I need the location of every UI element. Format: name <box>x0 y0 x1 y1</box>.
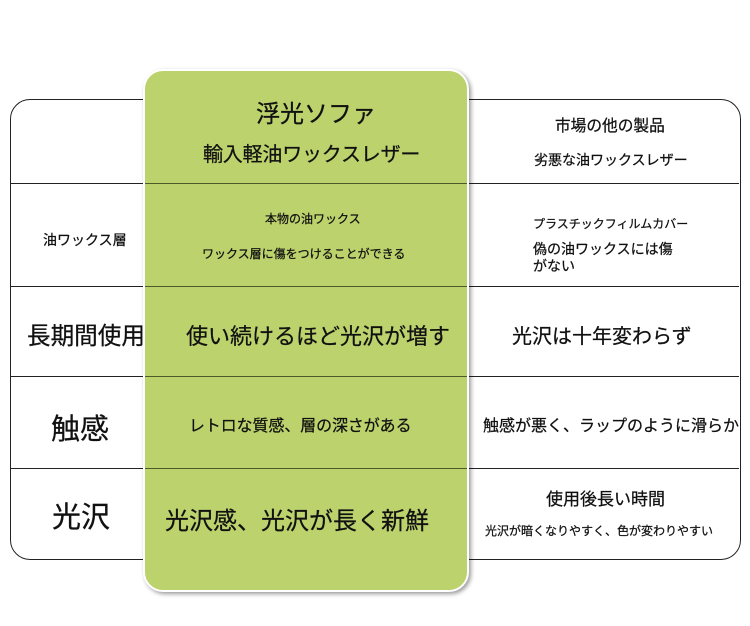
text: poor touch: 触感が悪く、ラップのように滑らか <box>483 418 739 435</box>
text: after long use: 使用後長い時間 <box>546 490 665 509</box>
text: fake oil wax has no scratches: 偽の油ワックスには傷がない <box>533 241 673 274</box>
heading: other material: 劣悪な油ワックスレザー <box>534 152 688 168</box>
green text: long lasting gloss: 光沢感、光沢が長く新鮮 <box>165 508 429 535</box>
row label: long term use: 長期間使用 <box>27 324 145 350</box>
row label: oil wax layer: 油ワックス層 <box>43 232 127 248</box>
row label: touch: 触感 <box>51 414 109 446</box>
green text: wax layer can be scratched: ワックス層に傷をつけることができる <box>202 247 405 261</box>
heading: other products: 市場の他の製品 <box>555 118 665 135</box>
green text: real oil wax: 本物の油ワックス <box>265 212 361 226</box>
comparison table frame <box>10 99 741 560</box>
row label: gloss: 光沢 <box>52 502 110 534</box>
text: plastic film cover: プラスチックフィルムカバー <box>533 217 688 231</box>
green highlight column <box>143 69 469 592</box>
green text: retro texture: レトロな質感、層の深さがある <box>189 418 411 435</box>
green text: gloss increases with use: 使い続けるほど光沢が増す <box>186 324 450 349</box>
text: gloss unchanged for ten years: 光沢は十年変わらず <box>512 326 692 348</box>
heading: product name: 浮光ソファ <box>256 101 376 128</box>
heading: product material: 輸入軽油ワックスレザー <box>203 144 420 166</box>
text: gloss darkens and color changes: 光沢が暗くなりやすく、色が変わりやすい <box>485 524 713 538</box>
